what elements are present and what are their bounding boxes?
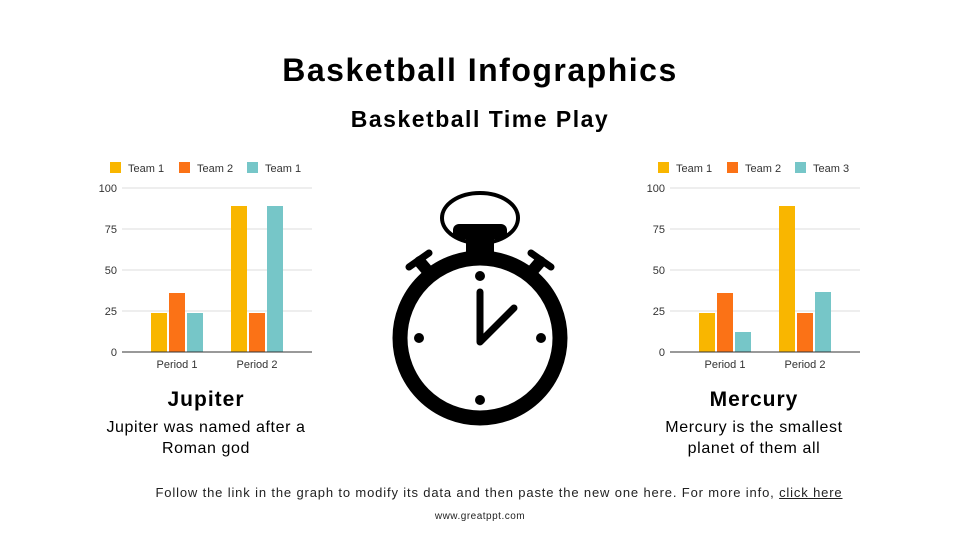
right chart: 25 — [653, 306, 665, 318]
footer note: Follow the link in the graph to modify its data and then paste the new one here. For more info, click here — [156, 485, 842, 500]
text: Jupiter: Jupiter was named after a Roman god — [106, 419, 306, 457]
left chart: Team 1 — [265, 163, 301, 175]
subtitle: Basketball Time Play — [351, 106, 609, 132]
right chart: Team 2 — [745, 163, 781, 175]
right chart: Team 3 — [813, 163, 849, 175]
left chart: Period 2 — [237, 359, 277, 371]
left chart: 75 — [105, 224, 117, 236]
right chart: 50 — [653, 265, 665, 277]
right chart: 100 — [647, 183, 665, 195]
right chart: Team 1 — [676, 163, 712, 175]
left chart — [99, 162, 312, 371]
right chart: Period 2 — [785, 359, 825, 371]
right chart: 0 — [659, 347, 665, 359]
left chart: 25 — [105, 306, 117, 318]
title: Basketball Infographics — [282, 52, 678, 88]
left chart: 50 — [105, 265, 117, 277]
footer url: www.greatppt.com — [435, 511, 525, 522]
text: Mercury: Mercury is the smallest planet of them all — [665, 419, 843, 457]
icon: stopwatch — [400, 193, 560, 418]
left chart: 100 — [99, 183, 117, 195]
left chart: Period 1 — [157, 359, 197, 371]
right chart: Period 1 — [705, 359, 745, 371]
right chart: 75 — [653, 224, 665, 236]
left chart: Team 1 — [128, 163, 164, 175]
heading: Jupiter: Jupiter — [167, 388, 244, 411]
left chart: 0 — [111, 347, 117, 359]
left chart: Team 2 — [197, 163, 233, 175]
heading: Mercury: Mercury — [710, 388, 798, 411]
right chart — [647, 162, 860, 371]
